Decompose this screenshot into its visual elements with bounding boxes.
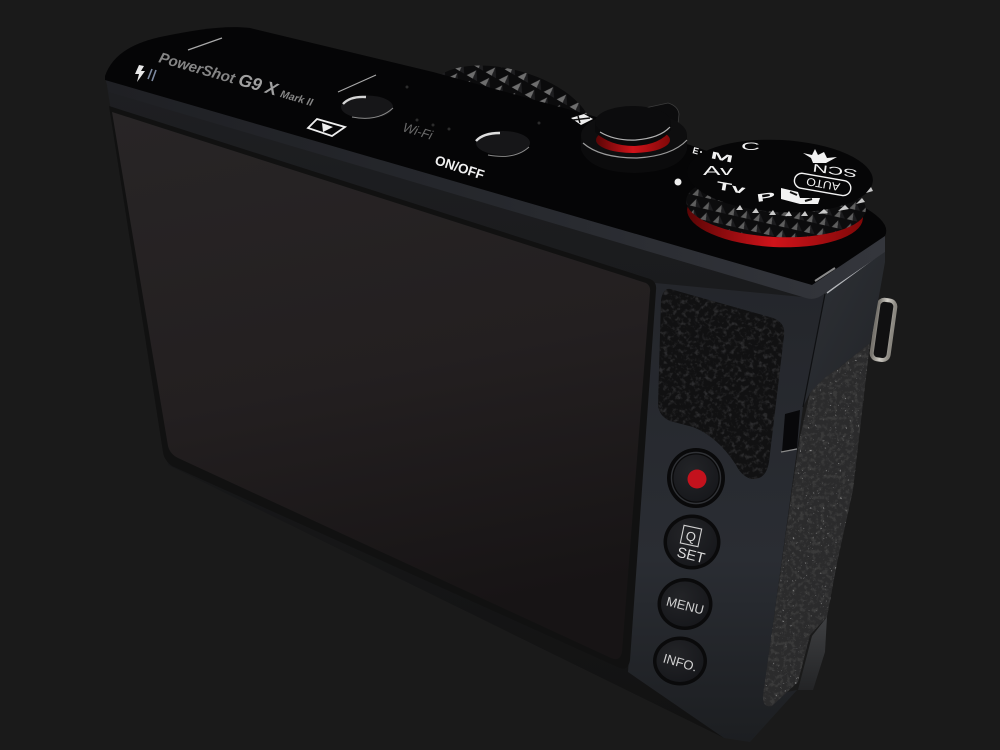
power button: [476, 131, 530, 155]
MENU button: MENU: [665, 594, 706, 617]
LCD screen: [112, 112, 650, 659]
knurled edge: [684, 168, 868, 242]
movie icon: [803, 149, 837, 163]
dial labels: E: [691, 145, 700, 156]
playback icon: [308, 119, 345, 136]
AUTO badge: [793, 172, 852, 197]
lower side panel: [798, 617, 827, 690]
Q/SET button: SET: [675, 545, 707, 567]
plate corner highlight: [815, 268, 835, 281]
dial labels: P: [756, 190, 776, 205]
model name: PowerShot G9 X Mark II: [157, 47, 317, 110]
edge highlights: [736, 187, 873, 216]
zoom lever: [645, 103, 679, 124]
indicator dots: [406, 86, 540, 130]
Q/SET button: Q: [684, 528, 697, 545]
right control strip: [628, 283, 825, 742]
position dot: [674, 178, 682, 186]
collar: [581, 135, 687, 173]
dial labels: Tv: [715, 180, 747, 197]
hybrid icon: [781, 188, 820, 204]
rear control dial: [418, 48, 602, 176]
top plate lip: [105, 78, 885, 299]
MENU button: [658, 578, 712, 630]
strap lug: [871, 299, 896, 361]
Q/SET button: [664, 514, 720, 570]
dial labels: M: [709, 150, 734, 166]
Wi-Fi label: Wi-Fi: [401, 120, 435, 143]
red record button: [667, 448, 725, 508]
shutter button and zoom lever: [581, 103, 687, 173]
screen bezel: [109, 106, 656, 668]
dial labels: C: [741, 141, 760, 153]
playback button: [341, 96, 393, 118]
AUTO badge: AUTO: [805, 175, 841, 192]
flash icon: [135, 65, 145, 82]
side latch: [782, 410, 800, 452]
red ring: [596, 127, 670, 153]
top plate: [105, 27, 886, 285]
camera body back: [107, 86, 825, 742]
side face of body: [803, 251, 885, 407]
dial labels: SCN: [812, 161, 858, 179]
mode dial: [684, 135, 875, 252]
camera illustration: [105, 27, 898, 732]
grip rubber: [760, 340, 875, 710]
INFO button: INFO.: [661, 651, 699, 675]
textured thumb patch: [658, 289, 784, 479]
dial top: [685, 135, 875, 217]
INFO button: [653, 636, 707, 686]
record dot: [688, 470, 706, 488]
dial labels: [691, 141, 858, 205]
red ring: [685, 176, 865, 252]
LCD window highlights: [188, 38, 376, 92]
small mode icon: [571, 114, 593, 125]
button cylinder: [595, 122, 671, 146]
dial labels: Av: [703, 163, 734, 178]
ON/OFF label: ON/OFF: [433, 153, 486, 183]
